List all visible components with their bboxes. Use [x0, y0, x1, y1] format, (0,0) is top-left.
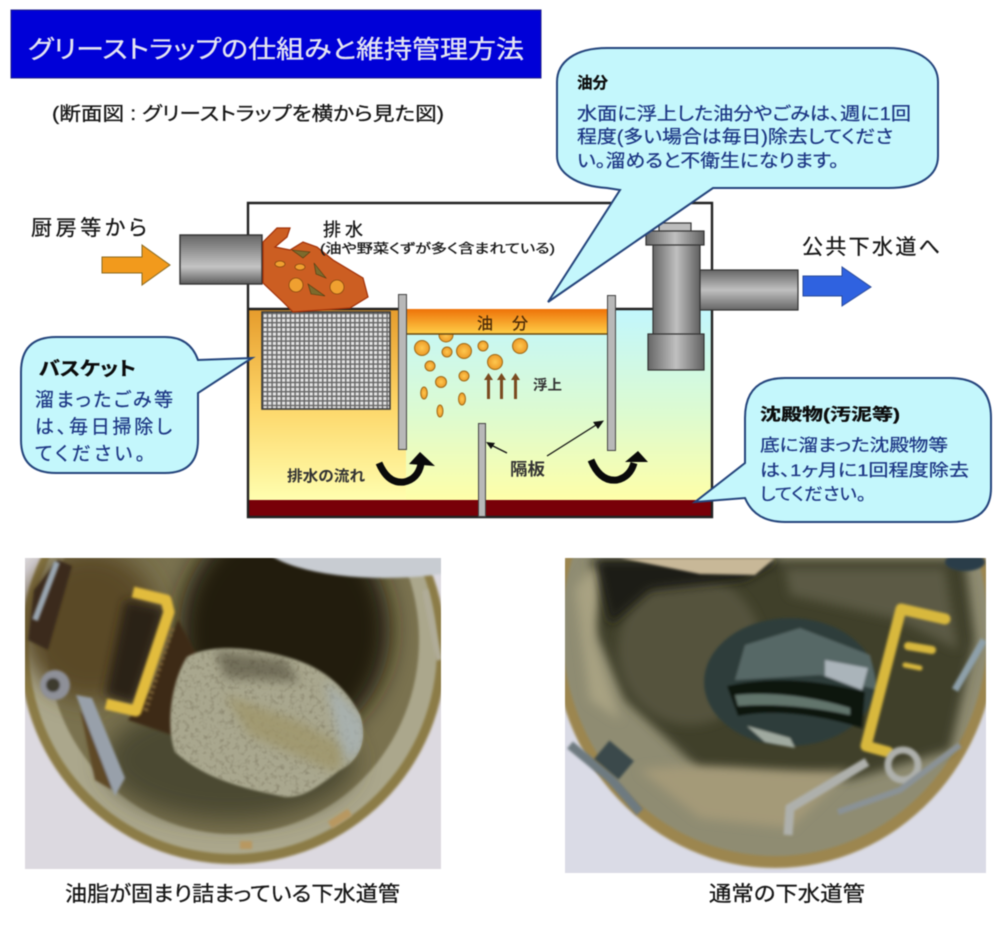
- callout: oil: 水面に浮上した油分やごみは、週に1回: [577, 104, 911, 124]
- light lower wall: [640, 766, 850, 828]
- tank air space: [249, 204, 711, 310]
- lid edge top right: [272, 557, 441, 580]
- outer ring: [564, 557, 987, 870]
- label: floating: 浮上: [533, 377, 562, 393]
- basket compartment water: [249, 309, 406, 501]
- ring clip left: [570, 745, 640, 812]
- subtitle: cross-section note: (断面図 : グリーストラップを横から見た図): [52, 103, 444, 125]
- caption: clogged pipe: 油脂が固まり詰まっている下水道管: [65, 883, 400, 906]
- arrow: flow under left baffle: [379, 452, 435, 482]
- callout: basket: てください。: [35, 444, 145, 465]
- ring highlights: [35, 562, 57, 620]
- caption: normal pipe: 通常の下水道管: [709, 883, 865, 906]
- callout: oil: 油分: [577, 74, 609, 92]
- label: wastewater: 排水: [323, 220, 363, 240]
- yellow step handle: [866, 609, 945, 752]
- label: wastewater: [320, 220, 555, 256]
- metal clasp: [40, 670, 125, 796]
- callout: sediment: 沈殿物(汚泥等): [760, 404, 900, 424]
- left wall: [20, 550, 160, 700]
- outlet pipe: [646, 223, 798, 370]
- inner dark wall: [590, 560, 975, 780]
- label: wastewater: (油や野菜くずが多く含まれている): [320, 241, 555, 256]
- olive concrete wall: [618, 575, 762, 725]
- oil layer: 油: [477, 315, 493, 333]
- callout: sediment: してください。: [760, 485, 866, 504]
- oil layer: [407, 309, 608, 334]
- callout: oil: [548, 48, 938, 302]
- inlet pipe: [180, 235, 262, 284]
- label: from the kitchen: 厨房等から: [31, 217, 147, 240]
- rusted grate behind plug: [128, 620, 200, 735]
- baffle centre: [478, 424, 486, 516]
- grease plug: [165, 645, 370, 800]
- photo: normal sewer pipe: [564, 557, 987, 874]
- callout: sediment: 底に溜まった沈殿物等: [760, 436, 948, 455]
- tank outline: [248, 203, 712, 517]
- label: baffle with leader arrows: [486, 420, 604, 479]
- label: baffle with leader arrows: 隔板: [510, 460, 545, 479]
- callout: basket: バスケット: [39, 358, 136, 380]
- metal clasp: [788, 745, 960, 835]
- title banner: グリーストラップの仕組みと維持管理方法: [28, 36, 524, 64]
- callout: basket: 溜まったごみ等: [35, 389, 173, 411]
- dark top band: [595, 560, 780, 625]
- callout: basket: [21, 337, 252, 473]
- label: to public sewer: 公共下水道へ: [802, 236, 940, 259]
- callout: basket: は、毎日掃除し: [35, 416, 172, 438]
- sludge layer: [249, 500, 712, 517]
- lid edge top: [620, 558, 775, 575]
- oil layer: 分: [512, 315, 528, 333]
- arrows: rising oil: [484, 373, 520, 399]
- baffle right: [608, 296, 616, 450]
- pipe opening: [704, 618, 878, 748]
- arrow: inflow: [102, 245, 170, 285]
- photo: sewer pipe clogged with hardened grease: [24, 557, 442, 870]
- diagram: grease trap tank: [180, 203, 798, 517]
- floating oil bubbles: [414, 328, 528, 417]
- arrow: flow under right baffle: [591, 451, 648, 480]
- callout: oil: い。溜めると不衛生になります。: [577, 151, 839, 171]
- title banner: [11, 10, 541, 78]
- main compartment water: [406, 309, 711, 501]
- callout: oil: 程度(多い場合は毎日)除去してくださ: [577, 127, 893, 147]
- outer ring: [24, 557, 442, 866]
- label: wastewater flow: 排水の流れ: [287, 467, 365, 485]
- callout: sediment: [695, 378, 991, 522]
- baffle left: [398, 294, 406, 450]
- wastewater pouring out: [263, 228, 368, 312]
- ring right highlight: [955, 640, 984, 690]
- rusted rim left: [28, 560, 72, 650]
- inner shaft shadow: [168, 558, 406, 728]
- yellow step handle: [106, 592, 169, 711]
- callout: sediment: は、1ヶ月に1回程度除去: [760, 461, 969, 480]
- arrow: outflow: [803, 267, 871, 306]
- basket mesh: [262, 312, 390, 409]
